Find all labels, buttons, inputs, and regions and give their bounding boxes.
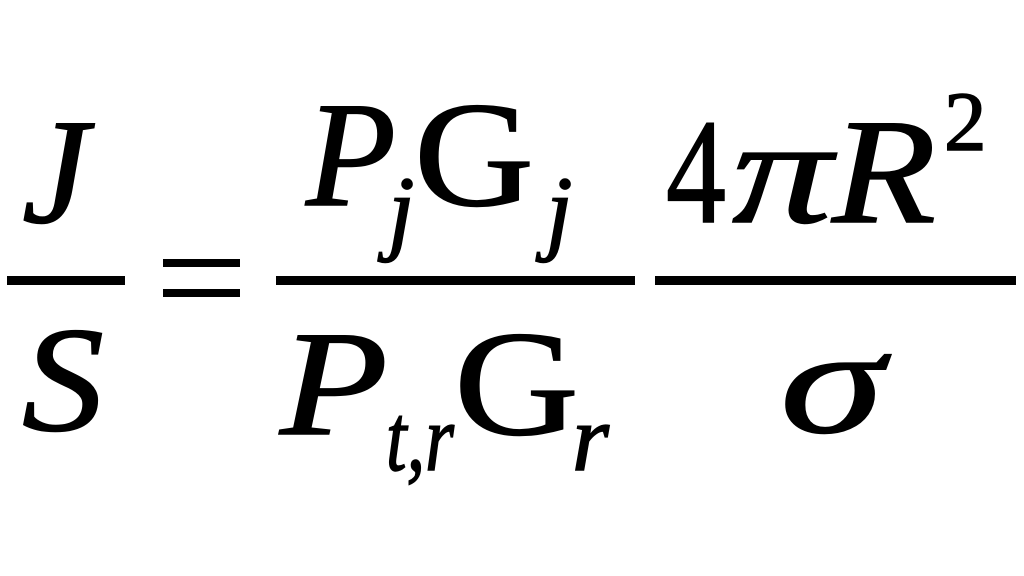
fraction 4 pi R^2 over sigma — [655, 75, 1016, 465]
fraction Pj Gj over Pt,r Gr: j — [535, 157, 572, 263]
fraction Pj Gj over Pt,r Gr: G — [454, 301, 579, 467]
fraction 4 pi R^2 over sigma: π — [732, 89, 837, 255]
fraction 4 pi R^2 over sigma: 2 — [944, 75, 986, 169]
fraction 4 pi R^2 over sigma: σ — [780, 299, 891, 465]
fraction Pj Gj over Pt,r Gr: P — [305, 72, 396, 238]
fraction Pj Gj over Pt,r Gr: j — [377, 157, 414, 263]
fraction J over S — [7, 89, 125, 463]
fraction J over S: J — [22, 89, 95, 255]
fraction Pj Gj over Pt,r Gr: G — [414, 72, 534, 238]
fraction 4 pi R^2 over sigma: R — [831, 89, 936, 255]
fraction 4 pi R^2 over sigma: 4 — [666, 89, 726, 255]
fraction Pj Gj over Pt,r Gr: t,r — [386, 385, 455, 491]
fraction Pj Gj over Pt,r Gr: r — [572, 385, 610, 491]
fraction Pj Gj over Pt,r Gr: P — [279, 301, 388, 467]
fraction Pj Gj over Pt,r Gr — [276, 72, 635, 491]
equals sign — [163, 259, 240, 297]
fraction J over S: S — [22, 297, 104, 463]
